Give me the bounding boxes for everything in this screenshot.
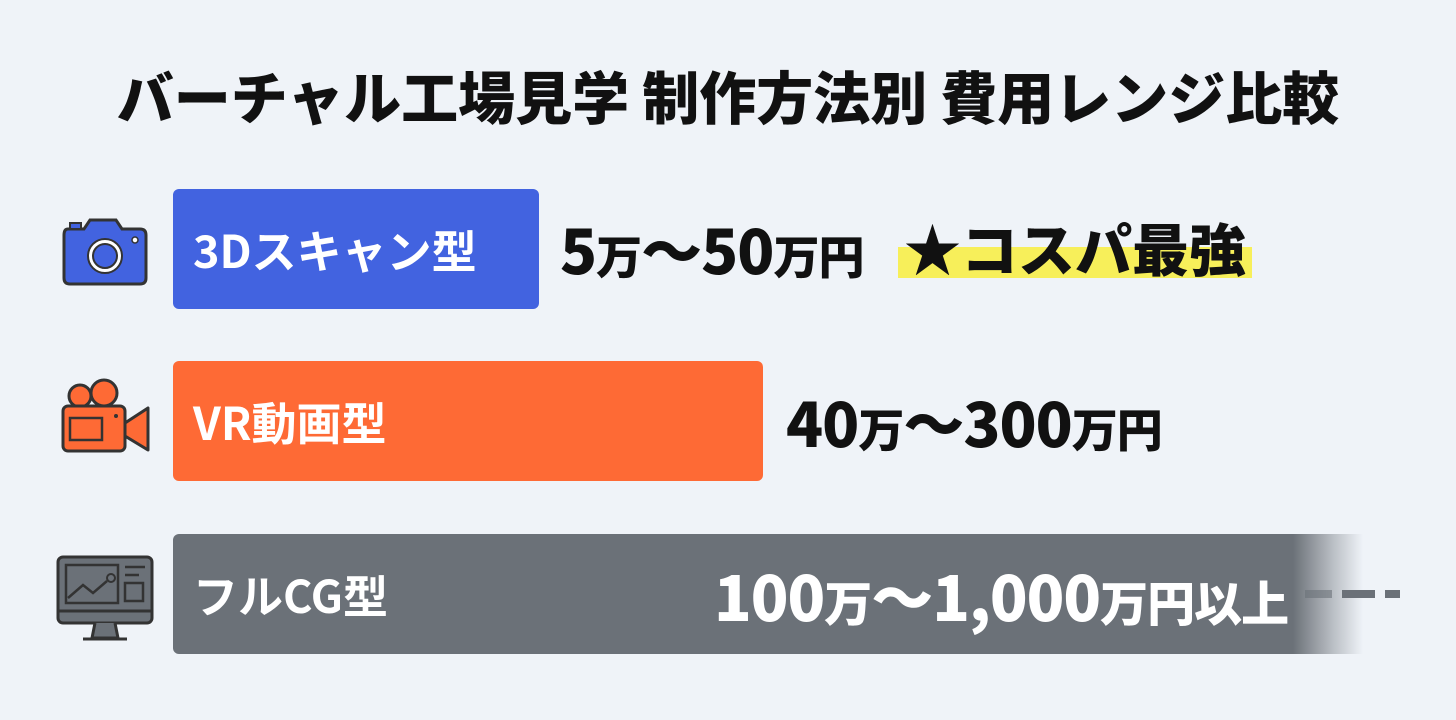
value: 3D scan: 5万～50万円 — [560, 203, 863, 292]
title: バーチャル工場見学 制作方法別 費用レンジ比較 — [117, 54, 1339, 136]
value: full CG: 100万～1,000万円以上 — [714, 549, 1288, 639]
bar: full CG — [173, 534, 1363, 654]
bar: 3D scan: 3Dスキャン型 — [193, 216, 477, 281]
icon: video camera — [62, 378, 150, 452]
icon: monitor — [56, 556, 154, 640]
bar: VR video — [173, 361, 763, 481]
bar: full CG: フルCG型 — [193, 561, 388, 626]
bar: 3D scan — [173, 189, 539, 309]
arrow: dashed continuation — [1305, 590, 1400, 598]
value: VR video: 40万～300万円 — [786, 376, 1162, 465]
bar: VR video: VR動画型 — [193, 388, 387, 453]
icon: camera — [62, 218, 148, 286]
callout: best cost performance: ★コスパ最強 — [904, 206, 1246, 288]
